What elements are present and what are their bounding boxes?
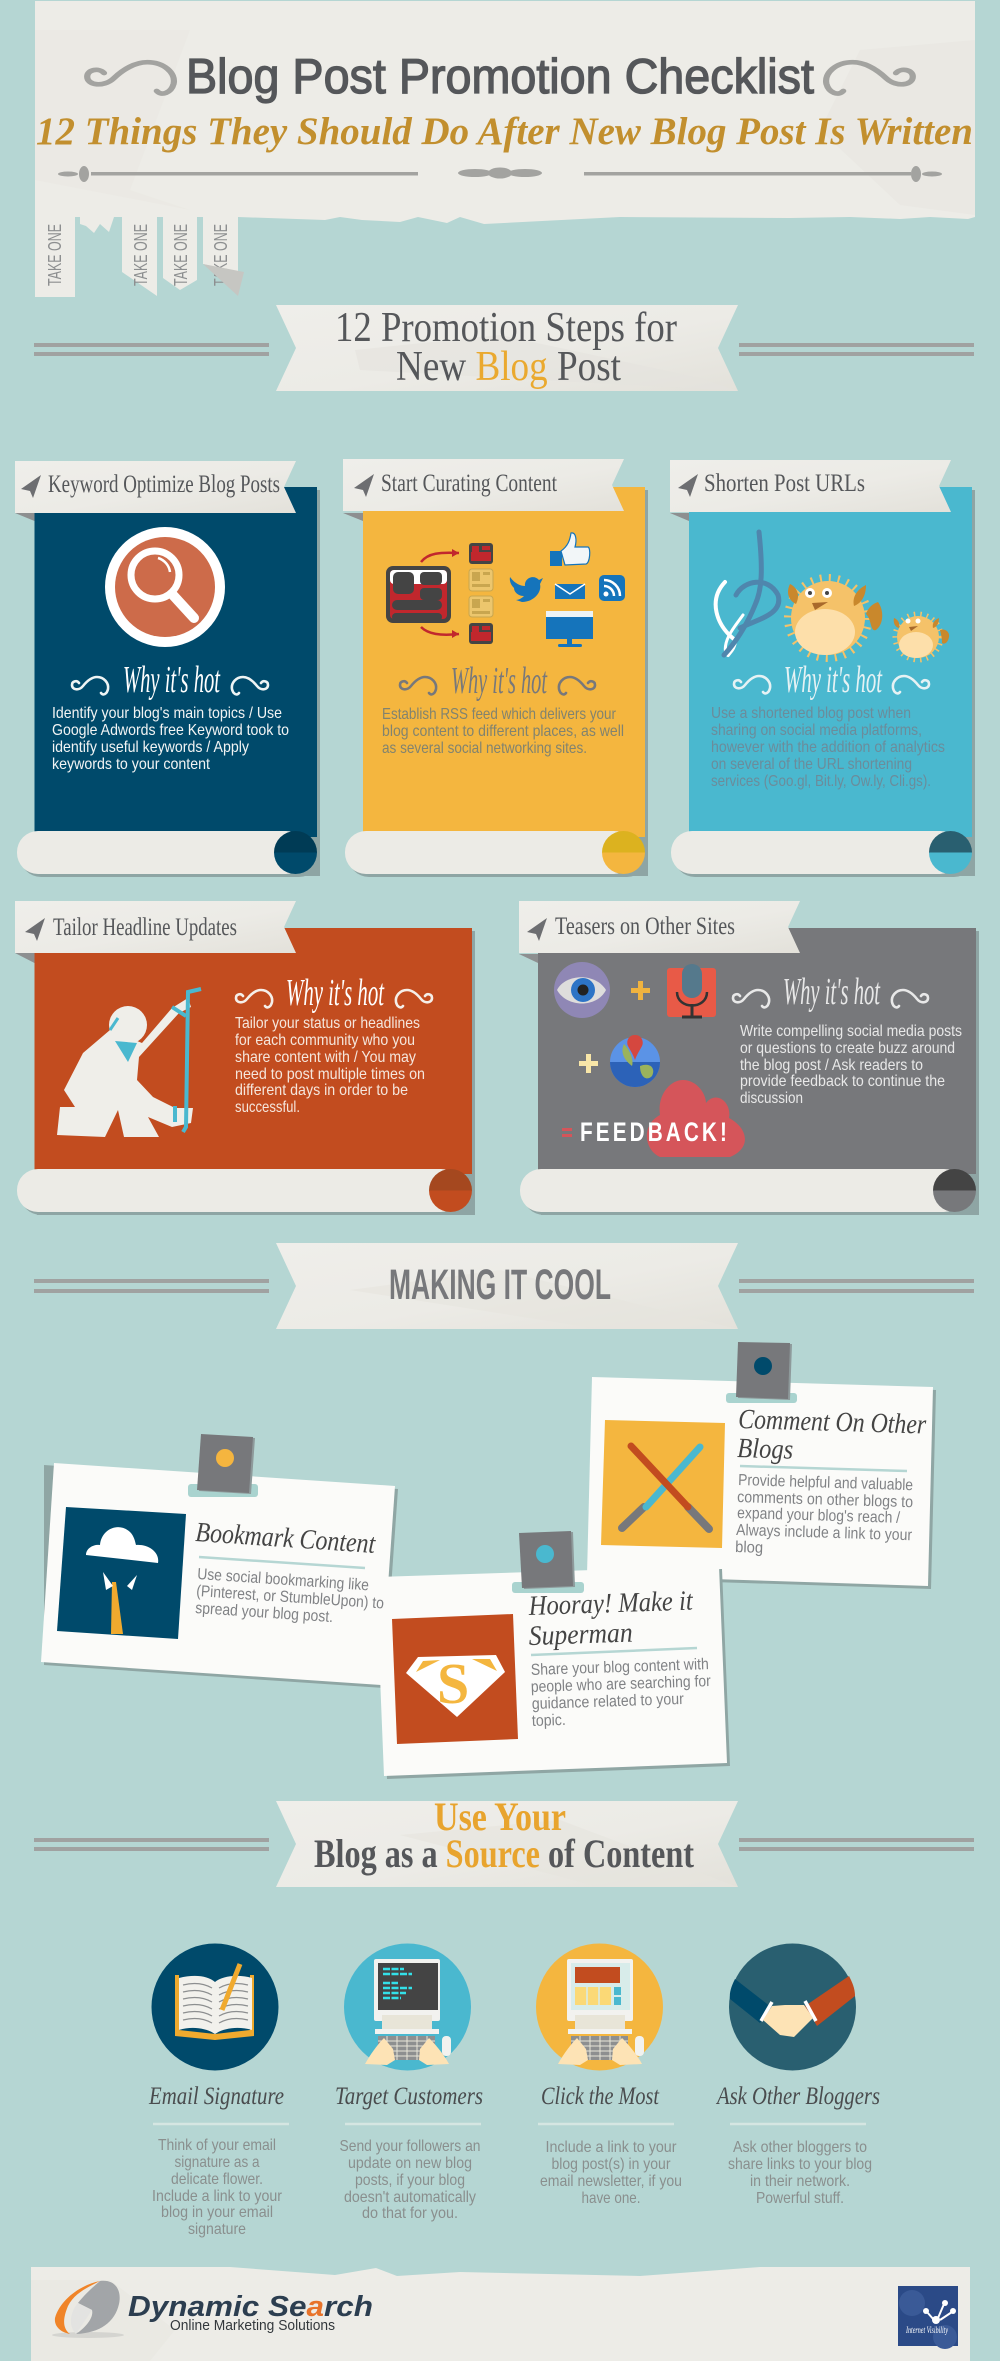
icon: computer with code (344, 1944, 471, 2070)
label: Target Customers (335, 2083, 483, 2110)
icon: seaweed (716, 532, 779, 655)
ornamental divider (58, 166, 942, 182)
icon: superman shield (392, 1614, 518, 1744)
roll (671, 831, 975, 877)
roll (17, 831, 320, 877)
logo wordmark: Dynamic Se arch (128, 2291, 373, 2323)
title flourish right (826, 62, 913, 94)
body text: Write compelling social media posts (740, 1023, 962, 1040)
tab labels: TAKE ONE (211, 224, 231, 286)
body text: different days in order to be (235, 1082, 408, 1099)
header panel (35, 1, 975, 297)
why it's hot (236, 972, 432, 1014)
section heading: use your blog (34, 1794, 974, 1887)
note title (737, 1404, 927, 1466)
body text: provide feedback to continue the (740, 1073, 945, 1090)
note text: people who are searching for (531, 1673, 712, 1696)
tip: email signature (148, 1944, 289, 2238)
body text: identify useful keywords / Apply (52, 739, 249, 756)
ribbon (670, 460, 951, 521)
note text: blog (735, 1539, 763, 1557)
description: have one. (582, 2190, 640, 2207)
body text: need to post multiple times on (235, 1066, 425, 1083)
icon: small puffer fish (894, 614, 949, 660)
icon: kneeling man measuring (57, 989, 201, 1137)
panel: tailor headline (15, 901, 475, 1215)
description (340, 2138, 480, 2222)
icon: rss (599, 575, 625, 601)
body text: Tailor your status or headlines (235, 1015, 420, 1032)
description: in their network. (750, 2173, 850, 2190)
body text: discussion (740, 1090, 803, 1107)
body text: keywords to your content (52, 756, 210, 773)
ribbon: Start Curating Content (381, 470, 557, 497)
note text (531, 1656, 712, 1730)
description (540, 2139, 682, 2207)
description: blog post(s) in your (552, 2156, 671, 2173)
ribbon (15, 901, 296, 963)
note text: bookmark content: (Pinterest, or StumbleUpon) to (196, 1583, 385, 1612)
icon: thumbs up (550, 533, 590, 566)
body text: however with the addition of analytics (711, 739, 945, 756)
description: delicate flower. (171, 2171, 263, 2188)
note text: guidance related to your (532, 1691, 685, 1713)
tab labels: TAKE ONE (131, 224, 151, 286)
body text: as several social networking sites. (382, 740, 587, 757)
tip: click the most (536, 1944, 682, 2207)
description: Send your followers an (340, 2138, 480, 2155)
description: Think of your email (158, 2137, 276, 2154)
tab labels: TAKE ONE (45, 224, 65, 286)
body text (382, 706, 624, 757)
icon: cloud and tie (57, 1507, 186, 1639)
why it's hot: Why it's hot (123, 659, 221, 701)
icon: large puffer fish (788, 578, 882, 658)
badge (898, 2286, 958, 2349)
body text: sharing on social media platforms, (711, 722, 922, 739)
description: signature as a (174, 2154, 260, 2171)
body text (235, 1015, 425, 1116)
description: Include a link to your (152, 2188, 283, 2205)
note text: expand your blog's reach / (737, 1505, 901, 1527)
body text (740, 1023, 962, 1107)
note title: Hooray! Make it (527, 1586, 694, 1622)
tab labels (45, 224, 231, 286)
section heading: 12 promotion steps: New Blog Post (396, 344, 621, 390)
clip (188, 1434, 258, 1497)
note text: comments on other blogs to (737, 1489, 913, 1511)
ribbon (15, 461, 296, 521)
body text: or questions to create buzz around (740, 1040, 955, 1057)
note title: Blogs (737, 1433, 794, 1466)
label: Email Signature (148, 2083, 284, 2110)
body text: on several of the URL shortening (711, 756, 912, 773)
description: email newsletter, if you (540, 2173, 682, 2190)
icon: monitor (546, 611, 593, 647)
note text: bookmark content (195, 1566, 385, 1626)
ribbon (519, 901, 800, 963)
why it's hot: Why it's hot (451, 660, 548, 702)
why it's hot: Why it's hot (783, 971, 881, 1013)
label: Click the Most (541, 2083, 660, 2110)
icon: feedback cloud (562, 1080, 745, 1157)
note: bookmark content (41, 1434, 398, 1688)
logo tagline: Online Marketing Solutions (170, 2317, 335, 2334)
section heading: use your blog: Blog as a Source of Content (314, 1831, 695, 1876)
ribbon: Keyword Optimize Blog Posts (48, 471, 280, 498)
description: Powerful stuff. (756, 2190, 844, 2207)
panel: keyword optimize (15, 461, 320, 877)
icon: handshake (729, 1944, 856, 2070)
description: posts, if your blog (355, 2172, 465, 2189)
why it's hot: Why it's hot (286, 972, 385, 1014)
note text: Provide helpful and valuable (738, 1472, 913, 1494)
panel: shorten urls (670, 460, 975, 877)
description (728, 2139, 872, 2207)
note: hooray superman (376, 1531, 730, 1779)
roll (17, 1169, 475, 1215)
curled tab corner (203, 264, 244, 296)
section heading: making it cool: MAKING IT COOL (389, 1261, 611, 1309)
note text: Share your blog content with (531, 1656, 709, 1679)
body text: blog content to different places, as well (382, 723, 624, 740)
note text: bookmark content: Use social bookmarking like (197, 1566, 370, 1594)
description: blog in your email (161, 2204, 273, 2221)
logo mark (52, 2281, 124, 2338)
ribbon: Tailor Headline Updates (53, 914, 237, 941)
icon: open book (152, 1944, 278, 2070)
ribbon (343, 459, 624, 521)
title flourish left (87, 62, 174, 94)
description: share links to your blog (728, 2156, 872, 2173)
body text: services (Goo.gl, Bit.ly, Ow.ly, Cli.gs). (711, 773, 931, 790)
description: signature (188, 2221, 246, 2238)
icon: plus (579, 1054, 598, 1073)
why it's hot (733, 971, 928, 1013)
section heading: making it cool (34, 1243, 974, 1329)
icon: eye (554, 962, 610, 1018)
badge: Internet Visibility (905, 2325, 948, 2335)
body text: the blog post / Ask readers to (740, 1057, 923, 1074)
section heading: 12 promotion steps (34, 305, 974, 391)
note text (735, 1472, 913, 1557)
icon: twitter bird (510, 577, 543, 602)
icon: feedback cloud: FEEDBACK! (580, 1117, 730, 1147)
body text: Google Adwords free Keyword took to (52, 722, 289, 739)
description: Include a link to your (546, 2139, 677, 2156)
body text: Establish RSS feed which delivers your (382, 706, 617, 723)
section heading: use your blog: Use Your (434, 1794, 566, 1839)
why it's hot: Why it's hot (784, 659, 883, 701)
note title: Superman (528, 1618, 633, 1652)
subtitle: 12 Things They Should Do After New Blog Post Is Written (36, 110, 973, 153)
footer panel (31, 2267, 970, 2361)
note: comment on other blogs (587, 1342, 936, 1589)
why it's hot (400, 660, 595, 702)
icon: plus (631, 981, 650, 1000)
description: update on new blog (348, 2155, 472, 2172)
note title: Bookmark Content (195, 1517, 377, 1560)
ribbon: Teasers on Other Sites (555, 913, 735, 940)
tab labels: TAKE ONE (171, 224, 191, 286)
note text: bookmark content: spread your blog post. (195, 1600, 334, 1626)
note title: Comment On Other (738, 1404, 927, 1441)
icon: crossed sticks (601, 1420, 725, 1548)
tip: target customers (335, 1944, 483, 2222)
body text: Identify your blog's main topics / Use (52, 705, 282, 722)
description: Ask other bloggers to (733, 2139, 867, 2156)
description (152, 2137, 283, 2238)
tip: ask other bloggers (715, 1944, 880, 2207)
why it's hot (734, 659, 929, 701)
roll (345, 831, 648, 877)
note text: topic. (532, 1712, 566, 1730)
icon: microphone (667, 964, 716, 1017)
title: Blog Post Promotion Checklist (186, 50, 814, 104)
body text: Use a shortened blog post when (711, 705, 911, 722)
panel: start curating (343, 459, 648, 877)
body text (711, 705, 945, 790)
body text: for each community who you (235, 1032, 415, 1049)
body text: share content with / You may (235, 1049, 416, 1066)
clip (726, 1342, 797, 1403)
ribbon: Shorten Post URLs (704, 470, 865, 497)
icon: superman shield: S (437, 1651, 469, 1716)
body text (52, 705, 289, 773)
description: doesn't automatically (344, 2189, 476, 2206)
icon: content curation graphic (386, 543, 493, 644)
panel: teasers on other sites (519, 901, 979, 1215)
label: Ask Other Bloggers (715, 2083, 880, 2110)
section heading: 12 promotion steps: 12 Promotion Steps for (335, 305, 677, 351)
body text: successful. (235, 1099, 300, 1116)
note text: Always include a link to your (736, 1522, 913, 1544)
description: do that for you. (362, 2205, 458, 2222)
icon: computer with web page (536, 1944, 663, 2070)
why it's hot (72, 659, 268, 701)
note title (527, 1586, 694, 1652)
icon: globe with pin (610, 1035, 660, 1087)
clip (512, 1531, 584, 1593)
icon: magnifier (105, 527, 225, 647)
roll (520, 1169, 979, 1215)
icon: mail (555, 584, 585, 599)
